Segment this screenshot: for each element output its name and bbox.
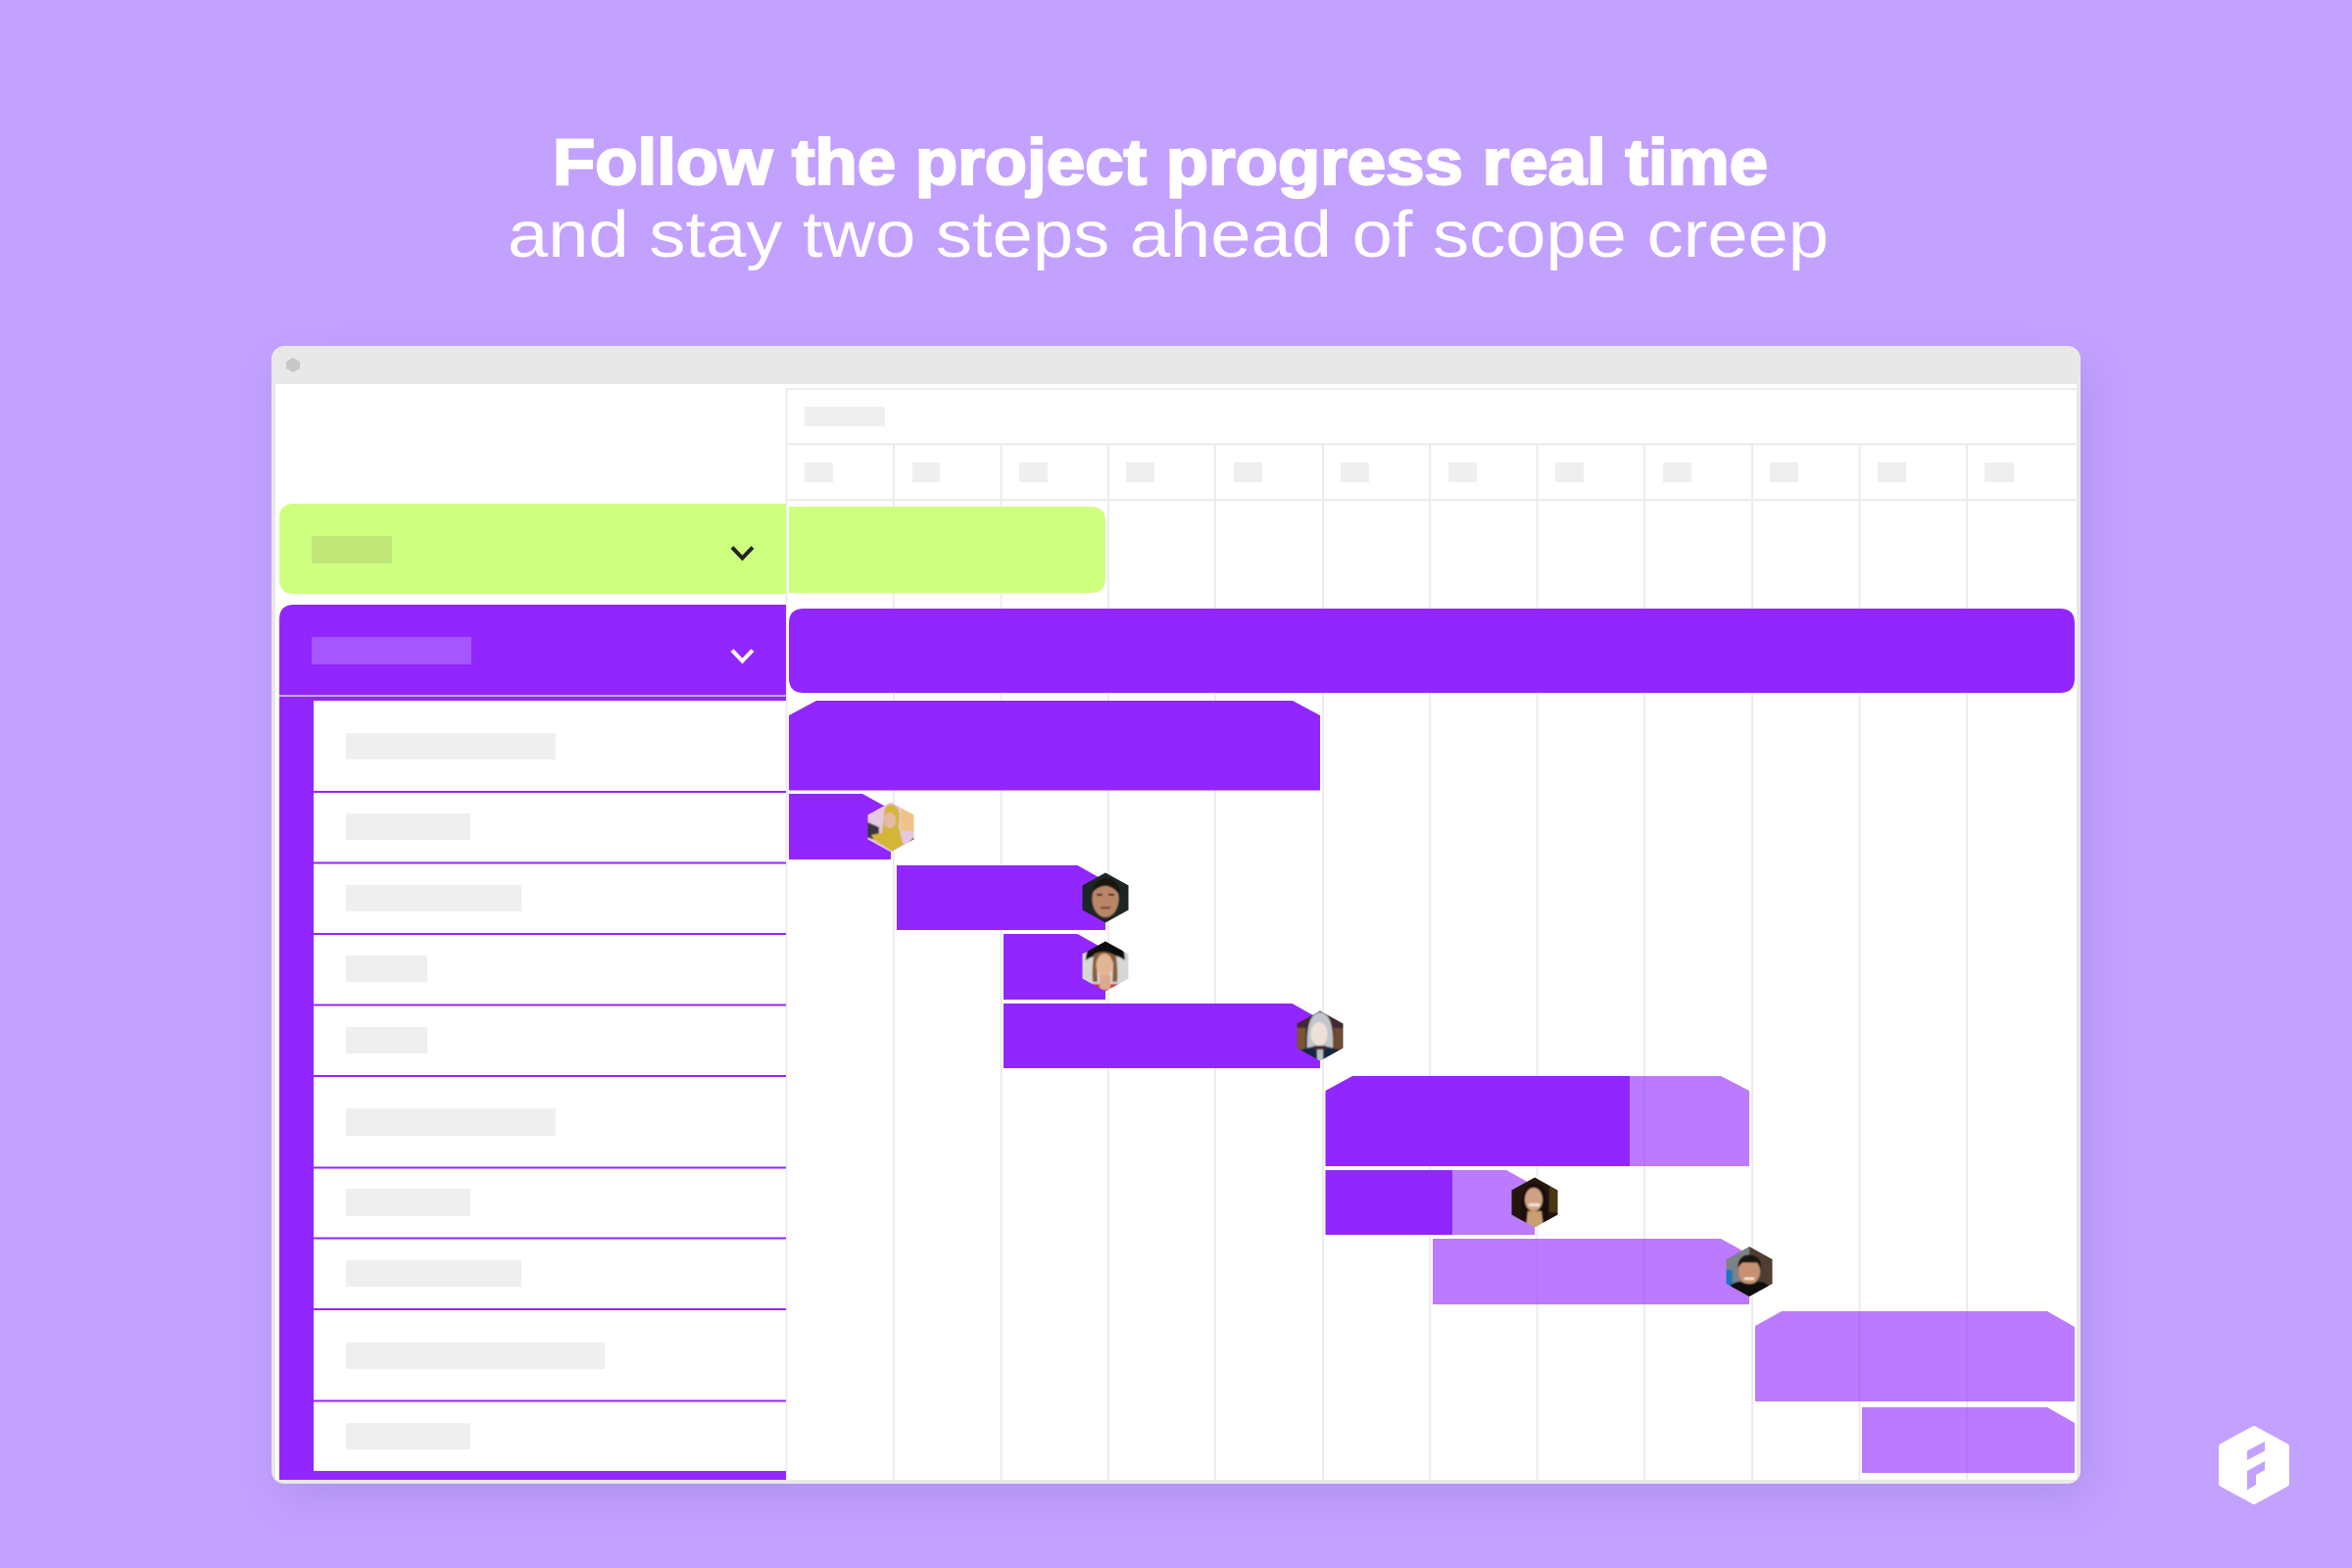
remaining portion [1452, 1170, 1535, 1235]
purple group sidebar [279, 605, 786, 1480]
completed portion [1325, 1170, 1452, 1235]
icon: white chevron [732, 651, 753, 661]
phase bar 1 [789, 701, 1320, 790]
avatar 3 [1082, 941, 1129, 992]
green row label placeholder [312, 536, 392, 564]
title line 1: Follow the project progress real time [553, 125, 1768, 198]
task bar 1 [789, 794, 891, 859]
task bar 7 [1862, 1407, 2075, 1473]
title [508, 125, 1829, 271]
task bar 6 [1433, 1239, 1749, 1304]
avatar 2 [1082, 872, 1129, 923]
avatar 5 [1511, 1178, 1558, 1227]
green group row [279, 504, 786, 594]
avatar 6 [1727, 1247, 1772, 1297]
task row separators [314, 791, 786, 1401]
task label placeholders [346, 733, 605, 1449]
purple summary bar [789, 609, 2075, 693]
row separator [279, 695, 786, 697]
phase bar 3 [1755, 1311, 2075, 1401]
title line 2: and stay two steps ahead of scope creep [508, 198, 1829, 271]
window content area [275, 384, 2077, 1480]
purple row label placeholder [312, 637, 471, 664]
purple row and side strip [279, 605, 786, 1480]
task bar 4 [1004, 1004, 1320, 1068]
window control dot [286, 358, 300, 372]
task bar 5 [1325, 1170, 1535, 1235]
app window [271, 346, 2081, 1484]
remaining portion [1630, 1076, 1749, 1166]
avatar 1 [868, 802, 913, 853]
window frame [271, 346, 2081, 1484]
timeline grid [786, 388, 2077, 1480]
icon: dark chevron [732, 547, 753, 559]
phase bar 2 [1325, 1076, 1749, 1166]
task bar 3 [1004, 934, 1105, 1000]
icon: brand logo [2222, 1429, 2286, 1501]
avatar 4 [1298, 1011, 1343, 1060]
green summary bar [789, 507, 1105, 593]
window shadow [279, 365, 2088, 1497]
task bar 2 [897, 865, 1105, 930]
completed portion [1325, 1076, 1630, 1166]
timeline header placeholders [805, 407, 2014, 482]
